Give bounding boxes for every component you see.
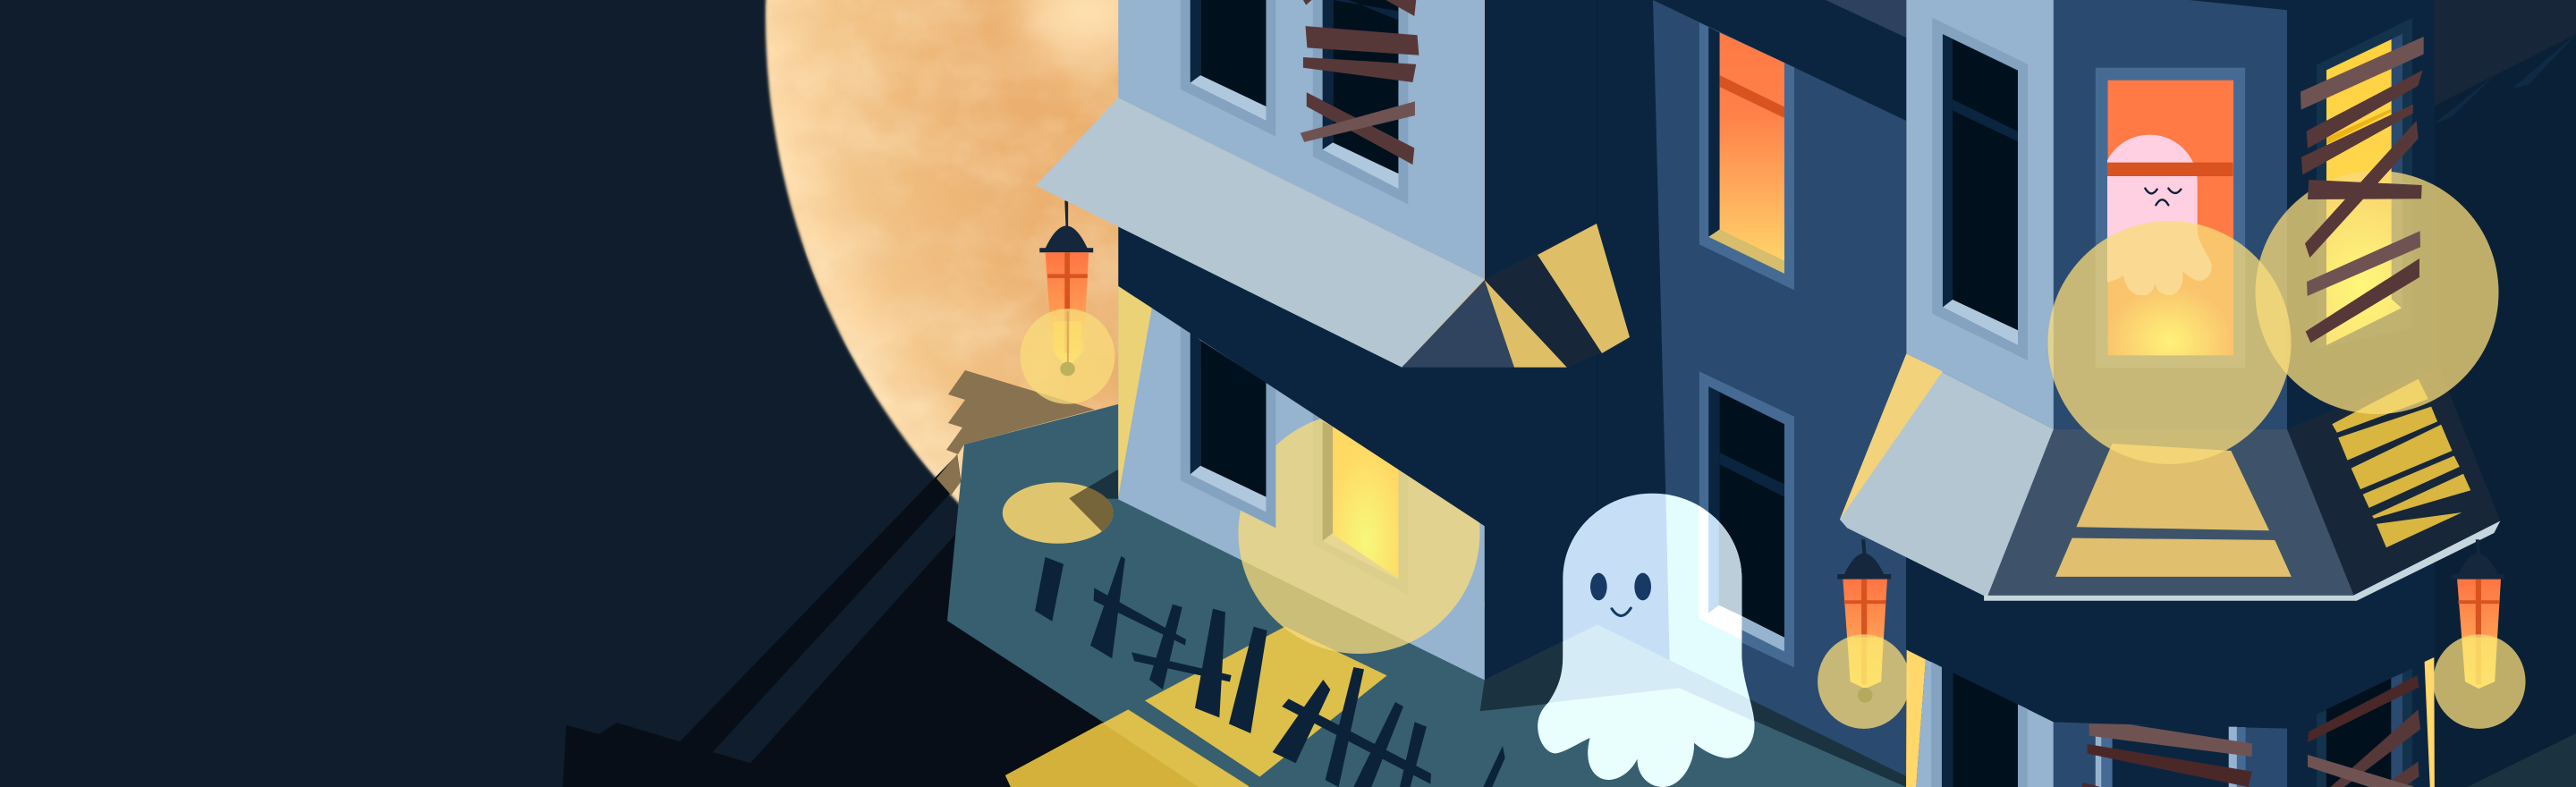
lower storey under the bay <box>1906 650 2435 787</box>
lit window frame <box>1313 414 1408 595</box>
lower bay front <box>2054 722 2287 787</box>
ground corner far right <box>2468 733 2576 787</box>
bay window light glow <box>2048 221 2292 464</box>
bay front window <box>2096 68 2245 368</box>
boarded window <box>1301 0 1419 204</box>
dark foreground ground with roof beams <box>563 454 1339 787</box>
bay window pale side <box>1906 0 2054 429</box>
awning corner yellow facet <box>1485 280 1567 368</box>
lower dark window <box>1953 673 2018 787</box>
full moon <box>763 0 1485 606</box>
sad pink ghost in the window <box>2102 135 2233 296</box>
navy building mass <box>1485 0 2576 787</box>
distant ruined roof silhouette <box>946 370 1095 454</box>
awning corner shadow facet <box>1402 280 1514 368</box>
lower bay wall pale <box>1906 650 1926 787</box>
bright hotspot of bay window <box>2118 296 2221 356</box>
bay front face <box>2054 0 2287 429</box>
teal courtyard ground <box>947 404 1914 787</box>
right window light glow <box>2256 171 2499 414</box>
main awning <box>1036 97 1485 368</box>
upper floor pale wall with boarded windows <box>1118 0 1485 279</box>
lower bay boards <box>2089 724 2252 757</box>
lamp light pool on ground <box>1003 482 1114 544</box>
awning rim <box>1984 521 2500 601</box>
pale awning left <box>1840 354 2054 597</box>
hanging lantern centre <box>1818 539 1910 729</box>
yellow sliver <box>2425 657 2435 787</box>
dark lower window <box>1181 321 1275 528</box>
boards on right window <box>2301 37 2424 343</box>
overhang underside <box>1118 224 1606 653</box>
lit window pane <box>1333 427 1398 579</box>
hanging lantern right <box>2433 539 2526 729</box>
dark window on blue wall <box>1699 371 1794 667</box>
building cast shadow <box>1070 470 1548 712</box>
hanging lantern left <box>1021 200 1114 404</box>
dark far-right tower <box>2434 0 2576 787</box>
yellow light mats on the ground <box>1005 627 1387 787</box>
awning dark side with yellow plank <box>1485 224 1630 368</box>
broken fence <box>1035 556 1505 787</box>
happy white ghost <box>1538 494 1755 787</box>
right boarded window (under glow) <box>2317 18 2412 349</box>
bay floor, awnings and slats <box>1840 354 2500 601</box>
yellow slats <box>2332 379 2470 547</box>
orange lit window <box>1699 22 1794 290</box>
roof beam shadow falling across the moon <box>936 454 961 495</box>
lower floor pale wall with glowing window <box>1118 286 1485 680</box>
dark window <box>1181 0 1275 137</box>
lower right boarded window <box>2317 710 2326 787</box>
window light glow circle <box>1238 412 1479 654</box>
blue wall <box>1653 0 1906 776</box>
dark awning right <box>2287 367 2500 595</box>
bay floor <box>1987 429 2353 595</box>
blue wall windows and bay <box>1699 0 2287 667</box>
far shadow strip along the blue wall <box>1480 581 1906 787</box>
